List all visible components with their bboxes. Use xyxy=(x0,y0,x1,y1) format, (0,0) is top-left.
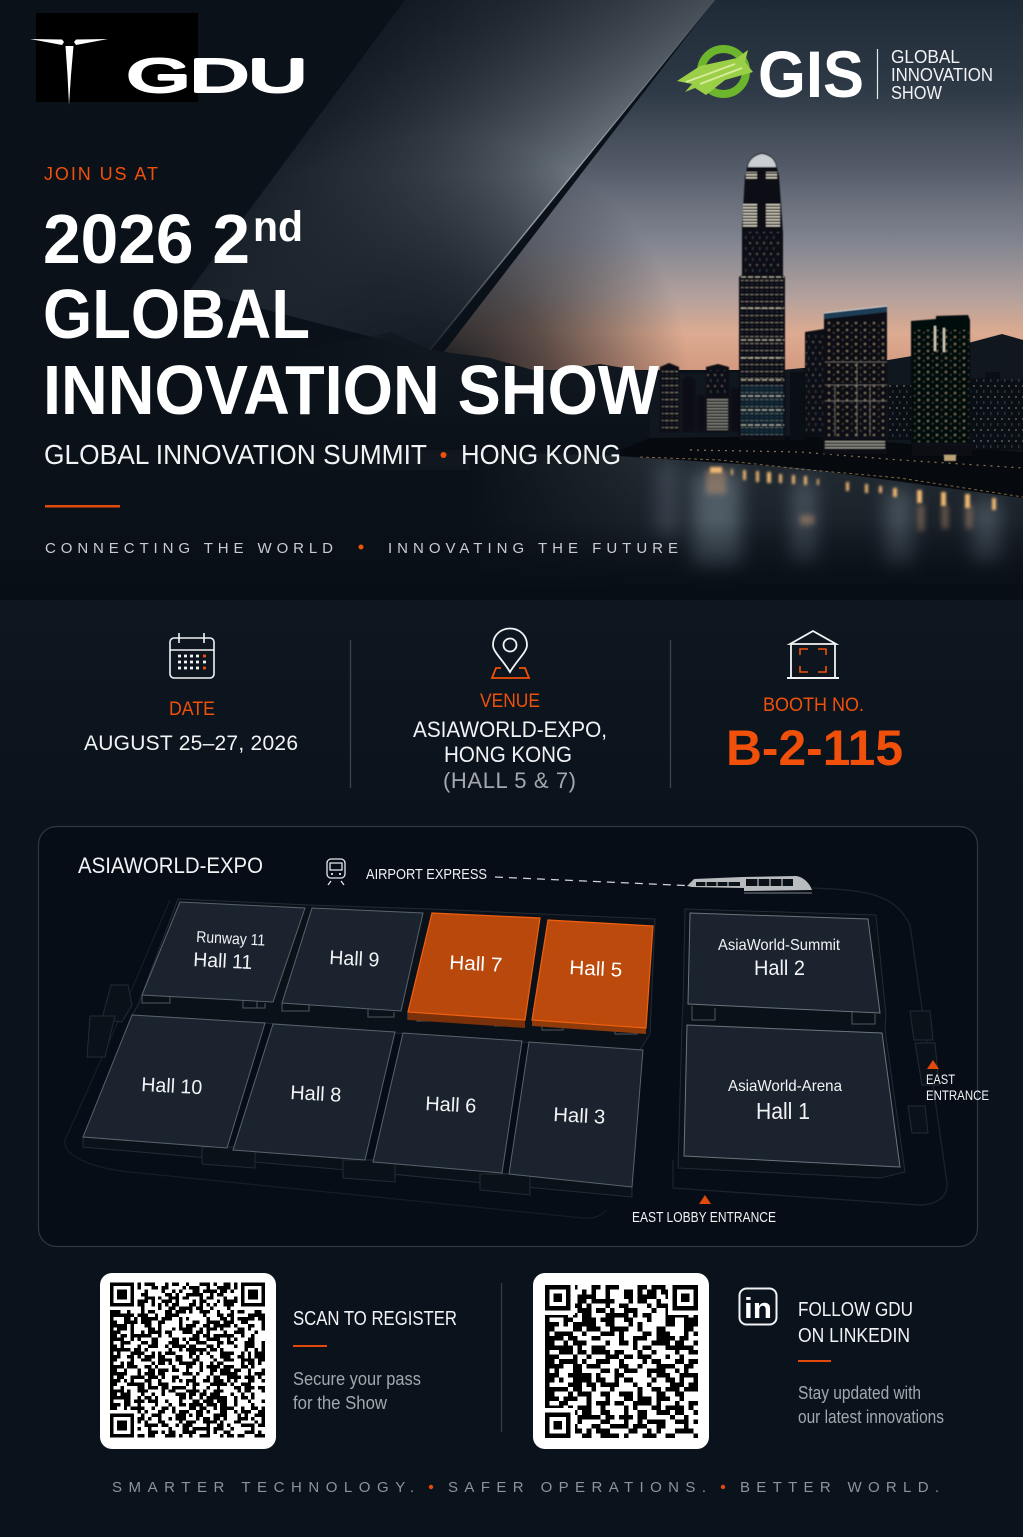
Hall 3 xyxy=(509,1042,643,1187)
harbour towers xyxy=(805,306,972,461)
tagline xyxy=(45,540,678,557)
icon: airport express train xyxy=(687,876,812,893)
marker: east lobby entrance xyxy=(632,1195,776,1226)
venue value xyxy=(413,717,607,793)
label: airport express: AIRPORT EXPRESS xyxy=(366,866,487,883)
Hall 7, highlighted xyxy=(408,913,540,1028)
booth block xyxy=(726,631,903,776)
footer slogan xyxy=(112,1479,939,1496)
date value: AUGUST 25–27, 2026 xyxy=(84,732,298,755)
eyebrow: JOIN US AT xyxy=(44,164,158,184)
marker: east lobby entrance: EAST LOBBY ENTRANCE xyxy=(632,1210,776,1226)
small skyline towers xyxy=(660,363,740,432)
icon: LinkedIn xyxy=(740,1288,776,1325)
QR code: register xyxy=(100,1273,276,1449)
subtitle: HONG KONG xyxy=(461,439,621,470)
Hall 10: Hall 10 xyxy=(141,1074,203,1099)
text: scan to register xyxy=(293,1308,457,1413)
Hall 10 xyxy=(83,1015,265,1148)
tagline: CONNECTING THE WORLD xyxy=(45,540,333,557)
marker: east entrance xyxy=(926,1060,989,1103)
Hall 8: Hall 8 xyxy=(290,1082,342,1107)
shoreline xyxy=(620,436,1023,498)
venue value: HONG KONG xyxy=(444,742,572,767)
Hall 5, highlighted xyxy=(532,920,653,1034)
show name: INNOVATION xyxy=(891,65,993,85)
map title: ASIAWORLD-EXPO xyxy=(78,853,263,878)
footer slogan: SAFER OPERATIONS. xyxy=(448,1479,706,1496)
Hall 2: Hall 2 xyxy=(754,957,805,980)
marker: east entrance: ENTRANCE xyxy=(926,1087,989,1103)
text: follow on LinkedIn: our latest innovations xyxy=(798,1407,944,1427)
left fade over harbour xyxy=(470,445,650,601)
icon: green swirl ring xyxy=(677,49,753,95)
Hall 1: Hall 1 xyxy=(756,1098,810,1124)
Hall 9 xyxy=(282,908,423,1011)
distant mountains xyxy=(290,332,1023,470)
hero panel: Hong Kong skyline photo xyxy=(0,0,1023,601)
venue block xyxy=(413,628,607,793)
tagline: INNOVATING THE FUTURE xyxy=(388,540,678,557)
panel: venue floor map xyxy=(38,826,989,1246)
title: 2026 2 xyxy=(43,200,250,278)
GIS logo xyxy=(677,37,993,111)
GDU logo xyxy=(30,13,307,105)
Hall 2 xyxy=(688,913,880,1013)
text: follow on LinkedIn xyxy=(798,1299,944,1427)
Hall 11: Runway 11 xyxy=(196,929,266,950)
icon: LinkedIn: in xyxy=(744,1293,772,1325)
date block xyxy=(84,633,298,755)
Hall 1 xyxy=(684,1025,900,1167)
text: scan to register: SCAN TO REGISTER xyxy=(293,1308,457,1330)
accent rule xyxy=(45,505,120,508)
title xyxy=(43,200,659,429)
label: venue: VENUE xyxy=(480,691,540,712)
label: date: DATE xyxy=(169,699,215,720)
water xyxy=(470,452,1023,600)
Hall 9: Hall 9 xyxy=(329,947,380,972)
icon: calendar xyxy=(170,633,214,678)
label: booth no: BOOTH NO. xyxy=(763,695,864,716)
show name: SHOW xyxy=(891,83,942,103)
icon: train xyxy=(327,859,345,885)
title: INNOVATION SHOW xyxy=(43,351,659,429)
Hall 8 xyxy=(233,1024,395,1160)
title: GLOBAL xyxy=(43,275,310,353)
GIS wordmark: GIS xyxy=(758,37,864,111)
QR code: LinkedIn xyxy=(533,1273,709,1449)
venue value: (HALL 5 & 7) xyxy=(443,768,576,793)
text: scan to register: for the Show xyxy=(293,1393,388,1413)
Hall 2: AsiaWorld-Summit xyxy=(718,937,841,954)
Hall 6: Hall 6 xyxy=(425,1093,477,1118)
panel: event details xyxy=(0,600,1023,825)
booth number: B-2-115 xyxy=(726,720,903,776)
Hall 3: Hall 3 xyxy=(553,1104,606,1129)
icon: booth building xyxy=(787,631,839,678)
site outline xyxy=(65,888,947,1218)
text: follow on LinkedIn: FOLLOW GDU xyxy=(798,1299,913,1321)
door details xyxy=(142,995,875,1034)
building bases and connector blocks xyxy=(83,899,939,1197)
footer slogan: SMARTER TECHNOLOGY. xyxy=(112,1479,414,1496)
Hall 7, highlighted: Hall 7 xyxy=(449,952,503,977)
show name xyxy=(891,47,993,103)
low background buildings xyxy=(790,372,1023,450)
venue value: ASIAWORLD-EXPO, xyxy=(413,717,607,742)
Hall 5, highlighted: Hall 5 xyxy=(569,957,623,982)
subtitle: GLOBAL INNOVATION SUMMIT xyxy=(44,439,427,470)
Hall 11: Hall 11 xyxy=(193,949,253,974)
GDU wordmark: GDU xyxy=(127,50,307,102)
text: scan to register: Secure your pass xyxy=(293,1369,421,1389)
footer slogan: BETTER WORLD. xyxy=(740,1479,939,1496)
text: follow on LinkedIn: ON LINKEDIN xyxy=(798,1325,910,1347)
Hall 6 xyxy=(373,1033,522,1173)
marker: east entrance: EAST xyxy=(926,1071,955,1087)
dashed airport express route xyxy=(495,877,685,886)
icon: map pin xyxy=(492,628,529,678)
Hall 1: AsiaWorld-Arena xyxy=(728,1078,842,1095)
landmark tower xyxy=(739,153,785,440)
Hall 11 xyxy=(142,902,305,1002)
icon: GDU wing mark xyxy=(30,39,108,105)
title: nd xyxy=(253,203,303,251)
show name: GLOBAL xyxy=(891,47,960,67)
text: follow on LinkedIn: Stay updated with xyxy=(798,1383,921,1403)
